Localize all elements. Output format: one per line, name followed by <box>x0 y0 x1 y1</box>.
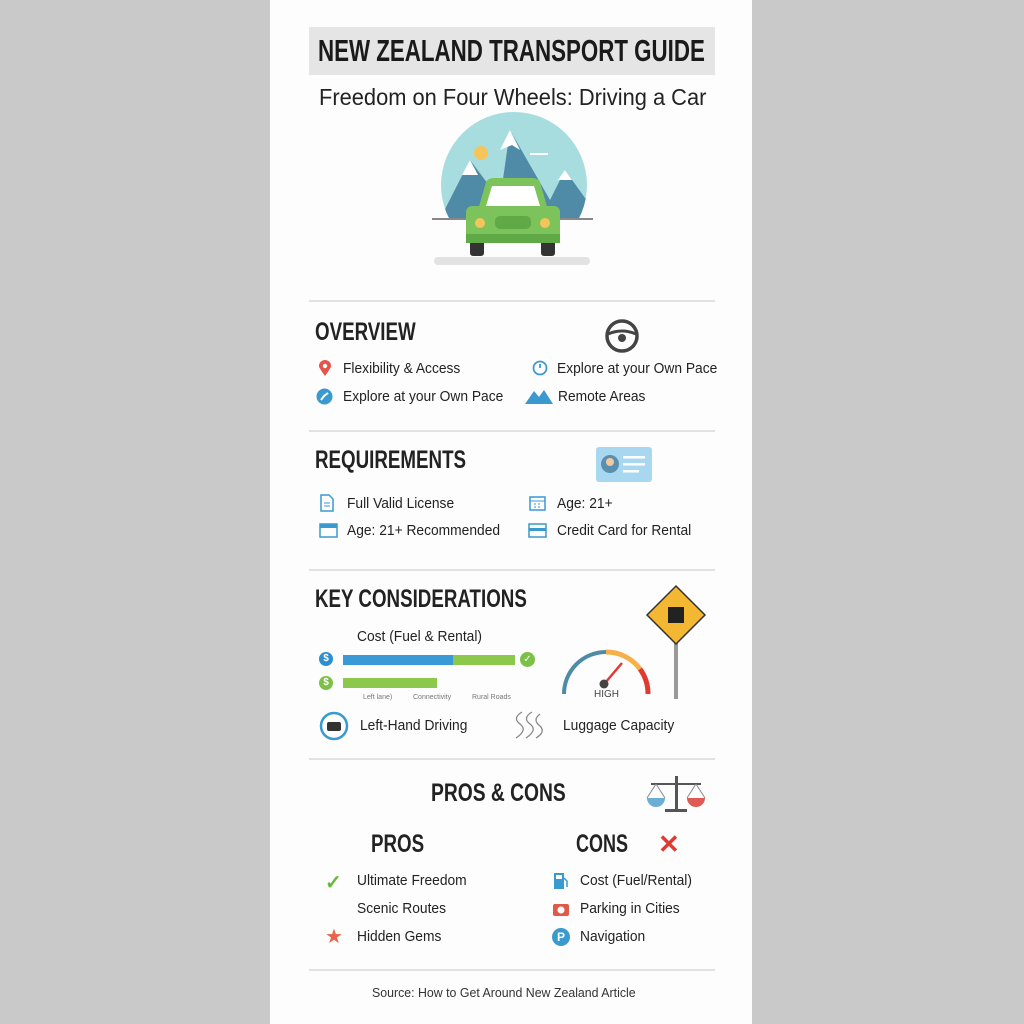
overview items: Explore at your Own Pace <box>557 360 717 377</box>
requirements items <box>319 494 691 539</box>
bar chart: cost: Connectivity <box>413 694 451 701</box>
cons column: ✕ <box>658 829 680 859</box>
icon: scale <box>646 776 706 812</box>
gauge: HIGH <box>594 689 619 700</box>
heading: overview: OVERVIEW <box>315 318 416 346</box>
panel: main <box>270 0 752 1024</box>
bar chart: cost: $ <box>323 653 329 664</box>
overview items <box>316 360 717 405</box>
requirements items: Credit Card for Rental <box>557 522 691 539</box>
bar chart: cost: $ <box>323 677 329 688</box>
item: luggage capacity: Luggage Capacity <box>563 717 674 734</box>
bar chart: cost <box>319 628 535 701</box>
icon: ID card <box>596 447 652 482</box>
title <box>309 27 715 75</box>
requirements items: Full Valid License <box>347 495 454 512</box>
cons column: CONS <box>576 830 628 858</box>
heading: pros & cons: PROS & CONS <box>431 779 566 807</box>
requirements items: Age: 21+ <box>557 495 613 512</box>
cons column: Navigation <box>580 928 645 945</box>
pros column: ★ <box>325 926 343 948</box>
pros column: Scenic Routes <box>357 900 446 917</box>
item: luggage capacity <box>516 712 674 738</box>
overview items: Remote Areas <box>558 388 645 405</box>
cons column <box>552 829 692 946</box>
cons column: Cost (Fuel/Rental) <box>580 872 692 889</box>
item: left-hand driving <box>320 712 467 740</box>
pros column: Ultimate Freedom <box>357 872 467 889</box>
bar chart: cost: Rural Roads <box>472 694 511 701</box>
pros column: Hidden Gems <box>357 928 441 945</box>
footer: source: Source: How to Get Around New Zealand Article <box>372 985 636 1000</box>
illustration: car and mountains <box>432 112 593 265</box>
bar chart: cost: Left lane) <box>363 694 392 701</box>
heading: key considerations: KEY CONSIDERATIONS <box>315 585 527 613</box>
item: left-hand driving: Left-Hand Driving <box>360 717 467 734</box>
overview items: Explore at your Own Pace <box>343 388 503 405</box>
cons column: Parking in Cities <box>580 900 680 917</box>
cons column: P <box>557 930 565 944</box>
title: NEW ZEALAND TRANSPORT GUIDE <box>318 33 705 68</box>
heading: requirements: REQUIREMENTS <box>315 446 466 474</box>
overview items: Flexibility & Access <box>343 360 460 377</box>
subtitle: Freedom on Four Wheels: Driving a Car <box>319 84 706 110</box>
requirements items: Age: 21+ Recommended <box>347 522 500 539</box>
icon: steering wheel <box>605 319 639 353</box>
pros column <box>325 830 467 948</box>
gauge <box>562 650 650 700</box>
bar chart: cost: Cost (Fuel & Rental) <box>357 628 482 645</box>
icon: road sign <box>646 585 706 699</box>
pros column: PROS <box>371 830 424 858</box>
bar chart: cost: ✓ <box>523 654 532 665</box>
pros column: ✓ <box>325 872 342 894</box>
